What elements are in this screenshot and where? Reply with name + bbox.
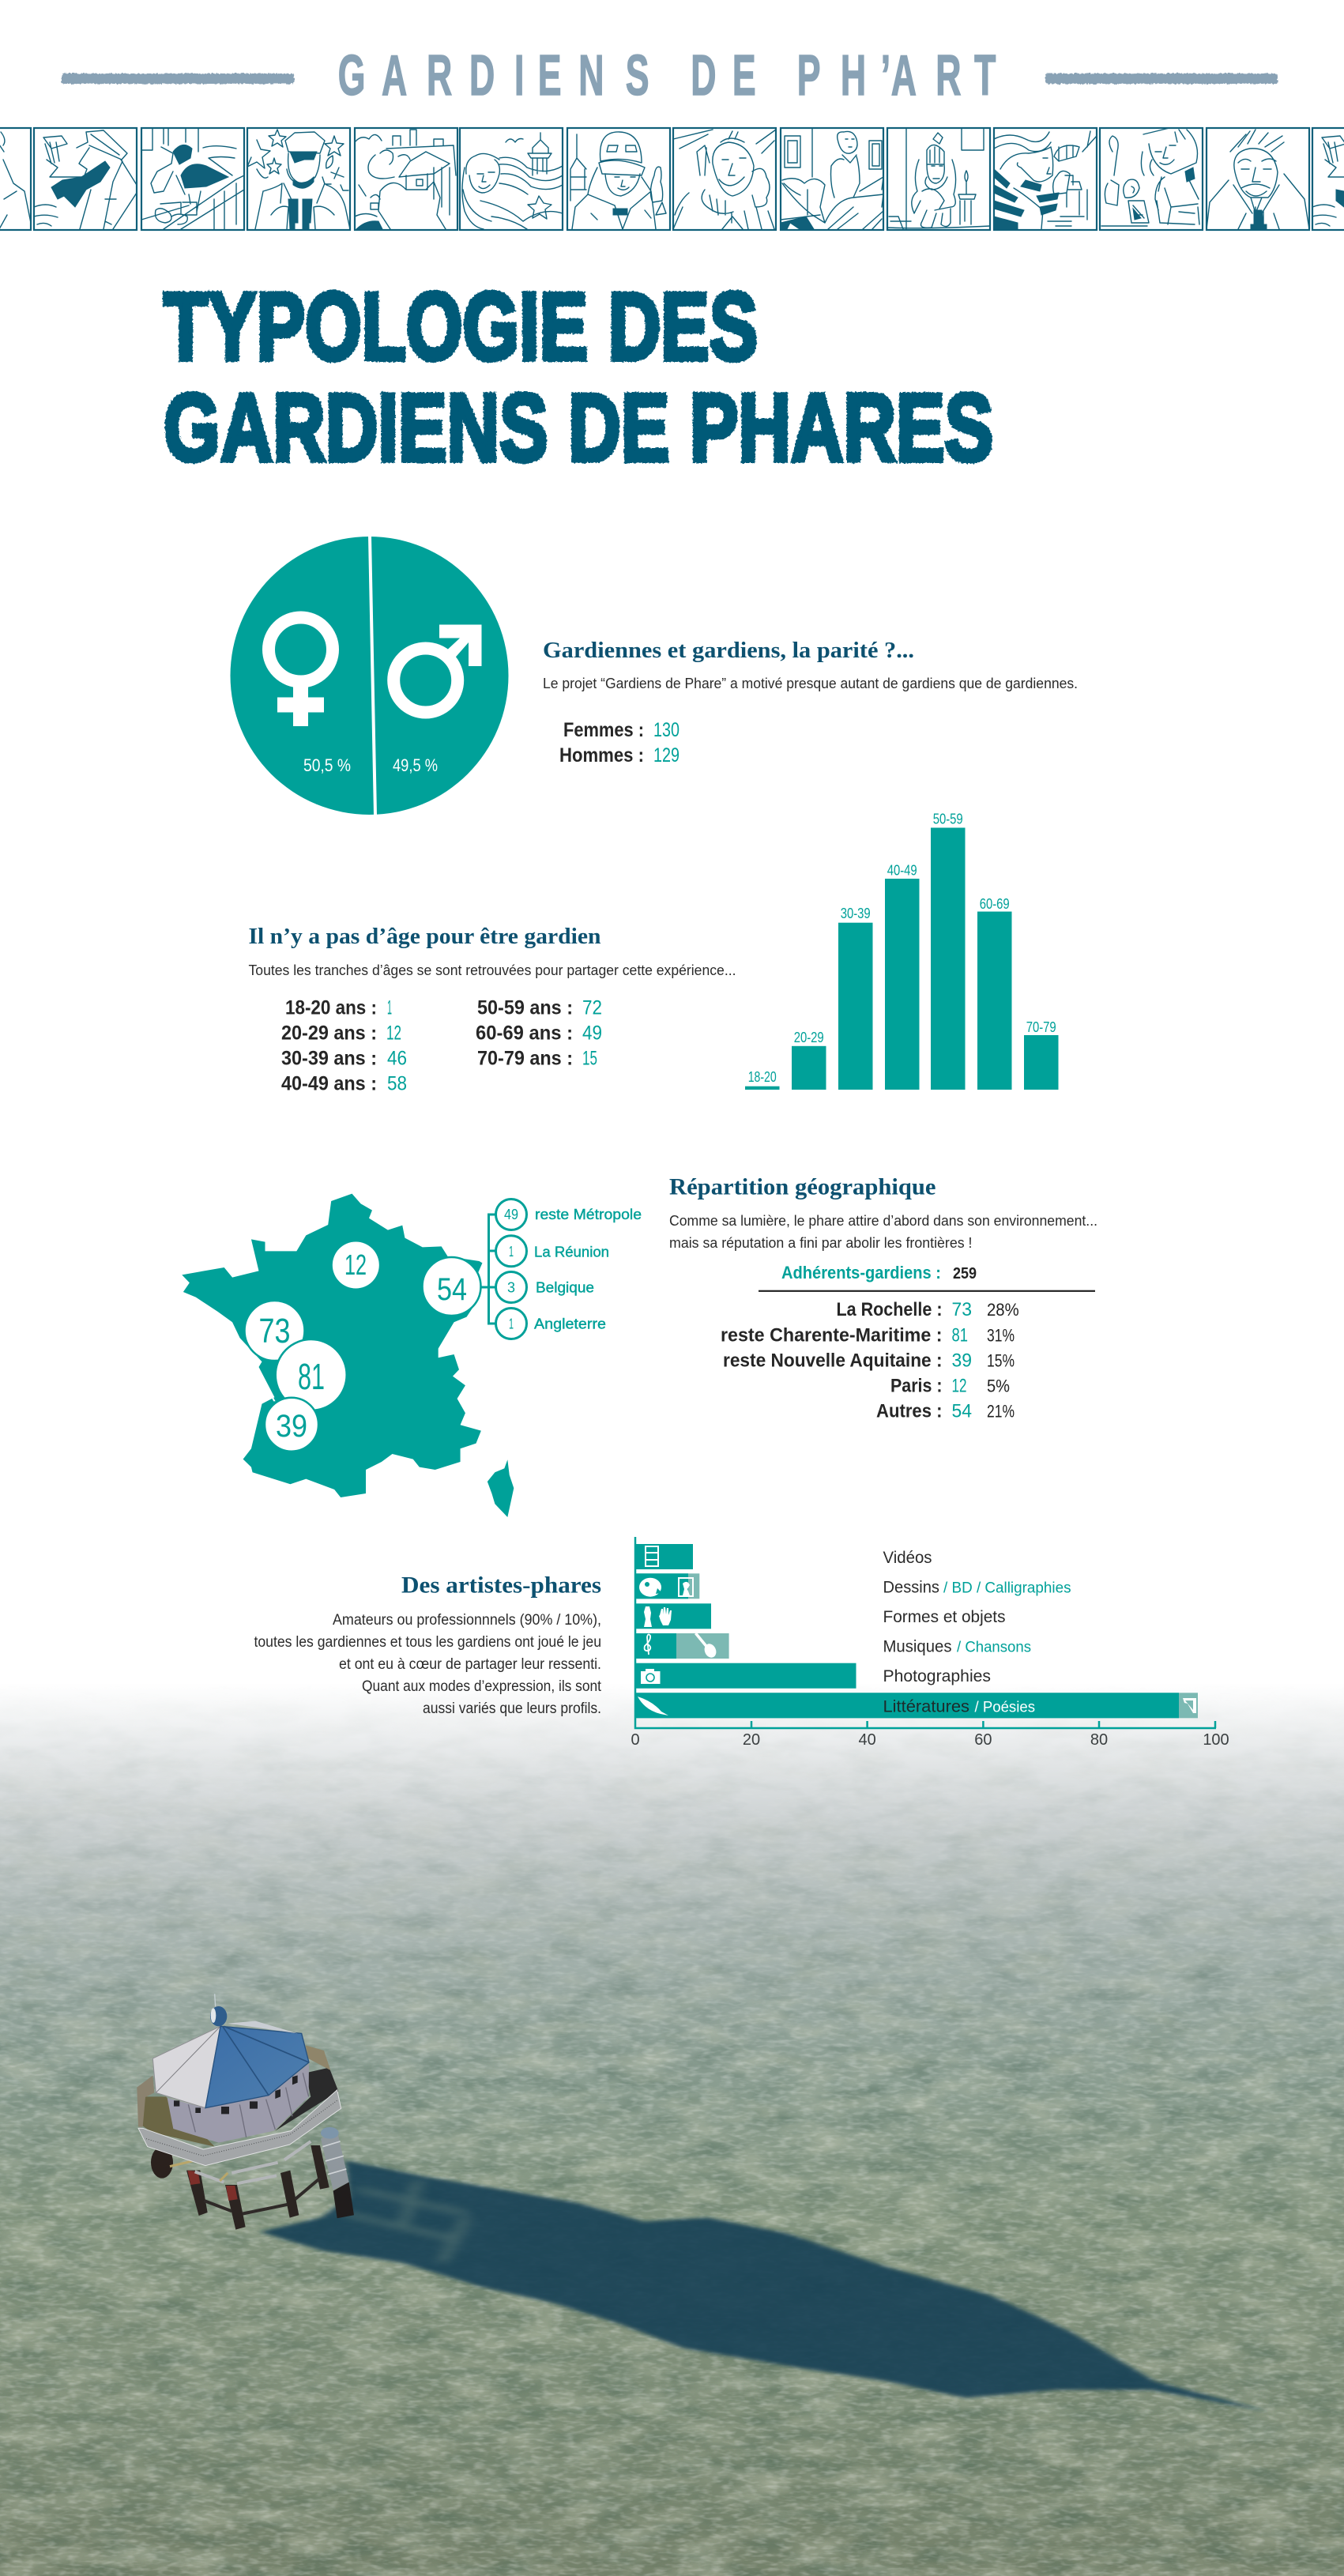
icon: palette [639, 1578, 662, 1597]
category labels: Photographies [883, 1667, 991, 1685]
age table: 46 [387, 1048, 407, 1070]
bubble: Paris 12: 12 [344, 1248, 367, 1281]
sub-region: reste Métropole: reste Métropole [535, 1207, 642, 1222]
icon: portrait frame [679, 1578, 693, 1596]
pie divider [370, 536, 375, 815]
sub-region: Belgique: Belgique [536, 1280, 594, 1296]
geography table: 54 [951, 1400, 972, 1422]
category labels: Formes et objets [883, 1608, 1005, 1626]
icon: female symbol [269, 618, 333, 726]
category labels: Vidéos [883, 1549, 932, 1567]
geography description: Comme sa lumière, le phare attire d’abord dans son environnement... [669, 1212, 1097, 1229]
axis labels: 80 [1090, 1731, 1108, 1749]
artists description: Amateurs ou professionnnels (90% / 10%), [333, 1612, 601, 1629]
age table: 30-39 ans : [281, 1048, 377, 1070]
geography description: mais sa réputation a fini par abolir les frontières ! [669, 1234, 972, 1251]
photo: pile lighthouse [137, 1994, 354, 2230]
bar labels: 50-59 [933, 811, 963, 827]
heading: geography: Répartition géographique [669, 1174, 936, 1199]
bubble: La Rochelle 73 [245, 1301, 305, 1361]
sub-region: Angleterre: 1 [509, 1316, 514, 1332]
bar labels: 70-79 [1026, 1019, 1056, 1035]
icon: camera [641, 1669, 661, 1684]
header title: GARDIENS DE PH’ART [338, 43, 996, 107]
icon: hand [659, 1607, 672, 1625]
sub-region: La Réunion [496, 1236, 609, 1267]
bubble: Charente-Maritime 81 [276, 1339, 347, 1410]
age table [281, 997, 602, 1095]
bubble: Charente-Maritime 81: 81 [298, 1356, 325, 1397]
geography table: La Rochelle : [836, 1299, 942, 1320]
age table: 40-49 ans : [281, 1073, 377, 1095]
bubble: Nouvelle-Aquitaine 39: 39 [276, 1409, 307, 1444]
strip panel: cropped captain [1312, 128, 1344, 230]
top rule left [62, 73, 294, 84]
age description: Toutes les tranches d’âges se sont retrouvées pour partager cette expérience... [248, 962, 736, 978]
strip panel: man painting a lighthouse [355, 128, 457, 230]
geography table: 31% [987, 1325, 1015, 1345]
icon: film strip [646, 1546, 658, 1566]
axes [635, 1537, 1216, 1728]
artists description: toutes les gardiennes et tous les gardiens ont joué le jeu [254, 1634, 601, 1651]
map of France [182, 1194, 642, 1517]
pie chart: gender split [231, 536, 509, 815]
parity description: Le projet “Gardiens de Phare” a motivé presque autant de gardiens que de gardiennes. [543, 676, 1078, 691]
Corsica [488, 1459, 514, 1517]
sub-region: reste Métropole [496, 1199, 642, 1230]
bracket connecting others to sub-regions [480, 1215, 495, 1324]
main title: TYPOLOGIE DES [164, 273, 758, 380]
sub-region: Belgique [496, 1272, 594, 1302]
bubble: La Rochelle 73: 73 [259, 1312, 291, 1350]
bubble: others 54 [422, 1257, 480, 1316]
strip panel: woman in striped sweater with drink [994, 128, 1097, 230]
geography table: reste Charente-Maritime : [721, 1324, 942, 1346]
bar labels: 40-49 [887, 863, 917, 879]
category labels [883, 1549, 1071, 1716]
estuary line [256, 1367, 274, 1401]
axis labels: 40 [858, 1731, 876, 1749]
geography table: Autres : [876, 1400, 942, 1422]
panel: parity text [543, 638, 1078, 766]
axis labels: 60 [974, 1731, 992, 1749]
age table: 50-59 ans : [477, 997, 573, 1019]
panel: age text [248, 925, 736, 1095]
women count: Femmes : [563, 719, 644, 741]
icon: harp [1183, 1698, 1196, 1713]
total members: 259 [953, 1265, 977, 1282]
comic strip: portraits of lighthouse keepers [0, 128, 1344, 230]
category labels: Dessins [883, 1579, 939, 1596]
bar labels: 30-39 [841, 906, 871, 921]
bar labels [748, 811, 1056, 1085]
age table: 15 [582, 1048, 597, 1070]
geography table: 39 [951, 1350, 972, 1371]
age table: 49 [582, 1022, 602, 1045]
panel: artists text [254, 1572, 602, 1717]
axis labels: 100 [1203, 1731, 1229, 1749]
age table: 1 [387, 997, 392, 1019]
axis labels: 20 [743, 1731, 760, 1749]
strip panel: bearded man [1207, 128, 1309, 230]
strip panel: person in bobble hat on a stool [887, 128, 990, 230]
bubble: Paris 12 [333, 1242, 379, 1288]
age table: 12 [386, 1022, 401, 1045]
bar labels: 60-69 [980, 896, 1010, 912]
men count: 129 [653, 744, 680, 766]
strip panel: man with spoon and tin [1100, 128, 1203, 230]
category labels: / Poésies [975, 1699, 1035, 1716]
pie label: women: 50,5 % [303, 755, 351, 775]
sub-region: La Réunion: La Réunion [534, 1244, 609, 1260]
icon: quill [638, 1697, 668, 1715]
geography table: 28% [987, 1300, 1019, 1320]
artists description [254, 1612, 602, 1717]
strip panel: woman with wave hair and lighthouse [460, 128, 563, 230]
category labels: / Chansons [957, 1639, 1031, 1656]
main title: GARDIENS DE PHARES [164, 374, 993, 481]
strip panel: sailor in helmet giving thumbs up [567, 128, 670, 230]
category labels: Littératures [883, 1697, 969, 1716]
main title [164, 273, 993, 481]
strip panel: captain with pipe [34, 128, 137, 230]
icon: male symbol [393, 624, 482, 713]
sub-region: Angleterre [496, 1309, 606, 1339]
icon: treble clef [645, 1634, 650, 1655]
category labels: / BD / Calligraphies [943, 1580, 1071, 1596]
panel: geographic distribution [669, 1174, 1097, 1422]
geography table: 15% [987, 1350, 1015, 1370]
axis labels: 0 [631, 1731, 640, 1749]
bar labels: 18-20 [748, 1069, 777, 1085]
age table: 72 [582, 997, 602, 1019]
rule [759, 1290, 1095, 1292]
sub-region: reste Métropole: 49 [504, 1207, 518, 1222]
strip panel: woman and unmade bed [781, 128, 883, 230]
pie label: men: 49,5 % [393, 755, 438, 775]
total members: Adhérents-gardiens : [781, 1263, 941, 1282]
artists description: et ont eu à cœur de partager leur ressenti. [339, 1656, 601, 1673]
lighthouse shadow on the water [261, 2160, 1268, 2412]
strip panel: captain with binoculars [247, 128, 350, 230]
sub-region: Belgique: 3 [507, 1280, 515, 1296]
men count: Hommes : [559, 744, 644, 766]
geography table: 12 [951, 1376, 967, 1397]
axis labels [631, 1731, 1229, 1749]
bar chart: modes of expression [631, 1537, 1229, 1749]
bar chart: age groups [745, 811, 1059, 1090]
heading: artists: Des artistes-phares [401, 1572, 601, 1598]
category labels: Musiques [883, 1637, 951, 1656]
photo background: aerial view of the sea [0, 1683, 1344, 2576]
sub-region: Angleterre: Angleterre [534, 1316, 606, 1332]
icon: statue [644, 1606, 652, 1627]
geography table: 21% [987, 1401, 1015, 1421]
geography table: Paris : [890, 1376, 942, 1397]
artists description: aussi variés que leurs profils. [423, 1700, 601, 1717]
geography table [721, 1299, 1019, 1422]
bar labels: 20-29 [794, 1030, 824, 1045]
age table: 18-20 ans : [285, 997, 377, 1019]
strip panel: woman with curly hair [673, 128, 776, 230]
geography table: reste Nouvelle Aquitaine : [723, 1350, 942, 1371]
heading: parity: Gardiennes et gardiens, la parité ?... [543, 638, 914, 663]
geography description [669, 1212, 1097, 1251]
age table: 58 [387, 1073, 407, 1095]
icon: guitar [695, 1633, 718, 1659]
strip panel: seabird on a railing [141, 128, 244, 230]
geography table: 81 [951, 1324, 968, 1346]
sub-region: La Réunion: 1 [509, 1244, 514, 1260]
bubble: Nouvelle-Aquitaine 39 [265, 1398, 318, 1452]
age table: 20-29 ans : [281, 1022, 377, 1045]
heading: age: Il n’y a pas d’âge pour être gardien [248, 925, 601, 949]
geography table: 5% [987, 1377, 1010, 1396]
age table: 60-69 ans : [476, 1022, 573, 1045]
bubble: others 54: 54 [437, 1272, 467, 1307]
bars [635, 1544, 1198, 1718]
women count: 130 [653, 719, 680, 741]
top rule right [1045, 73, 1278, 84]
age table: 70-79 ans : [477, 1048, 573, 1070]
strip panel: cropped figure [0, 128, 31, 230]
geography table: 73 [951, 1299, 972, 1320]
artists description: Quant aux modes d’expression, ils sont [362, 1678, 602, 1695]
